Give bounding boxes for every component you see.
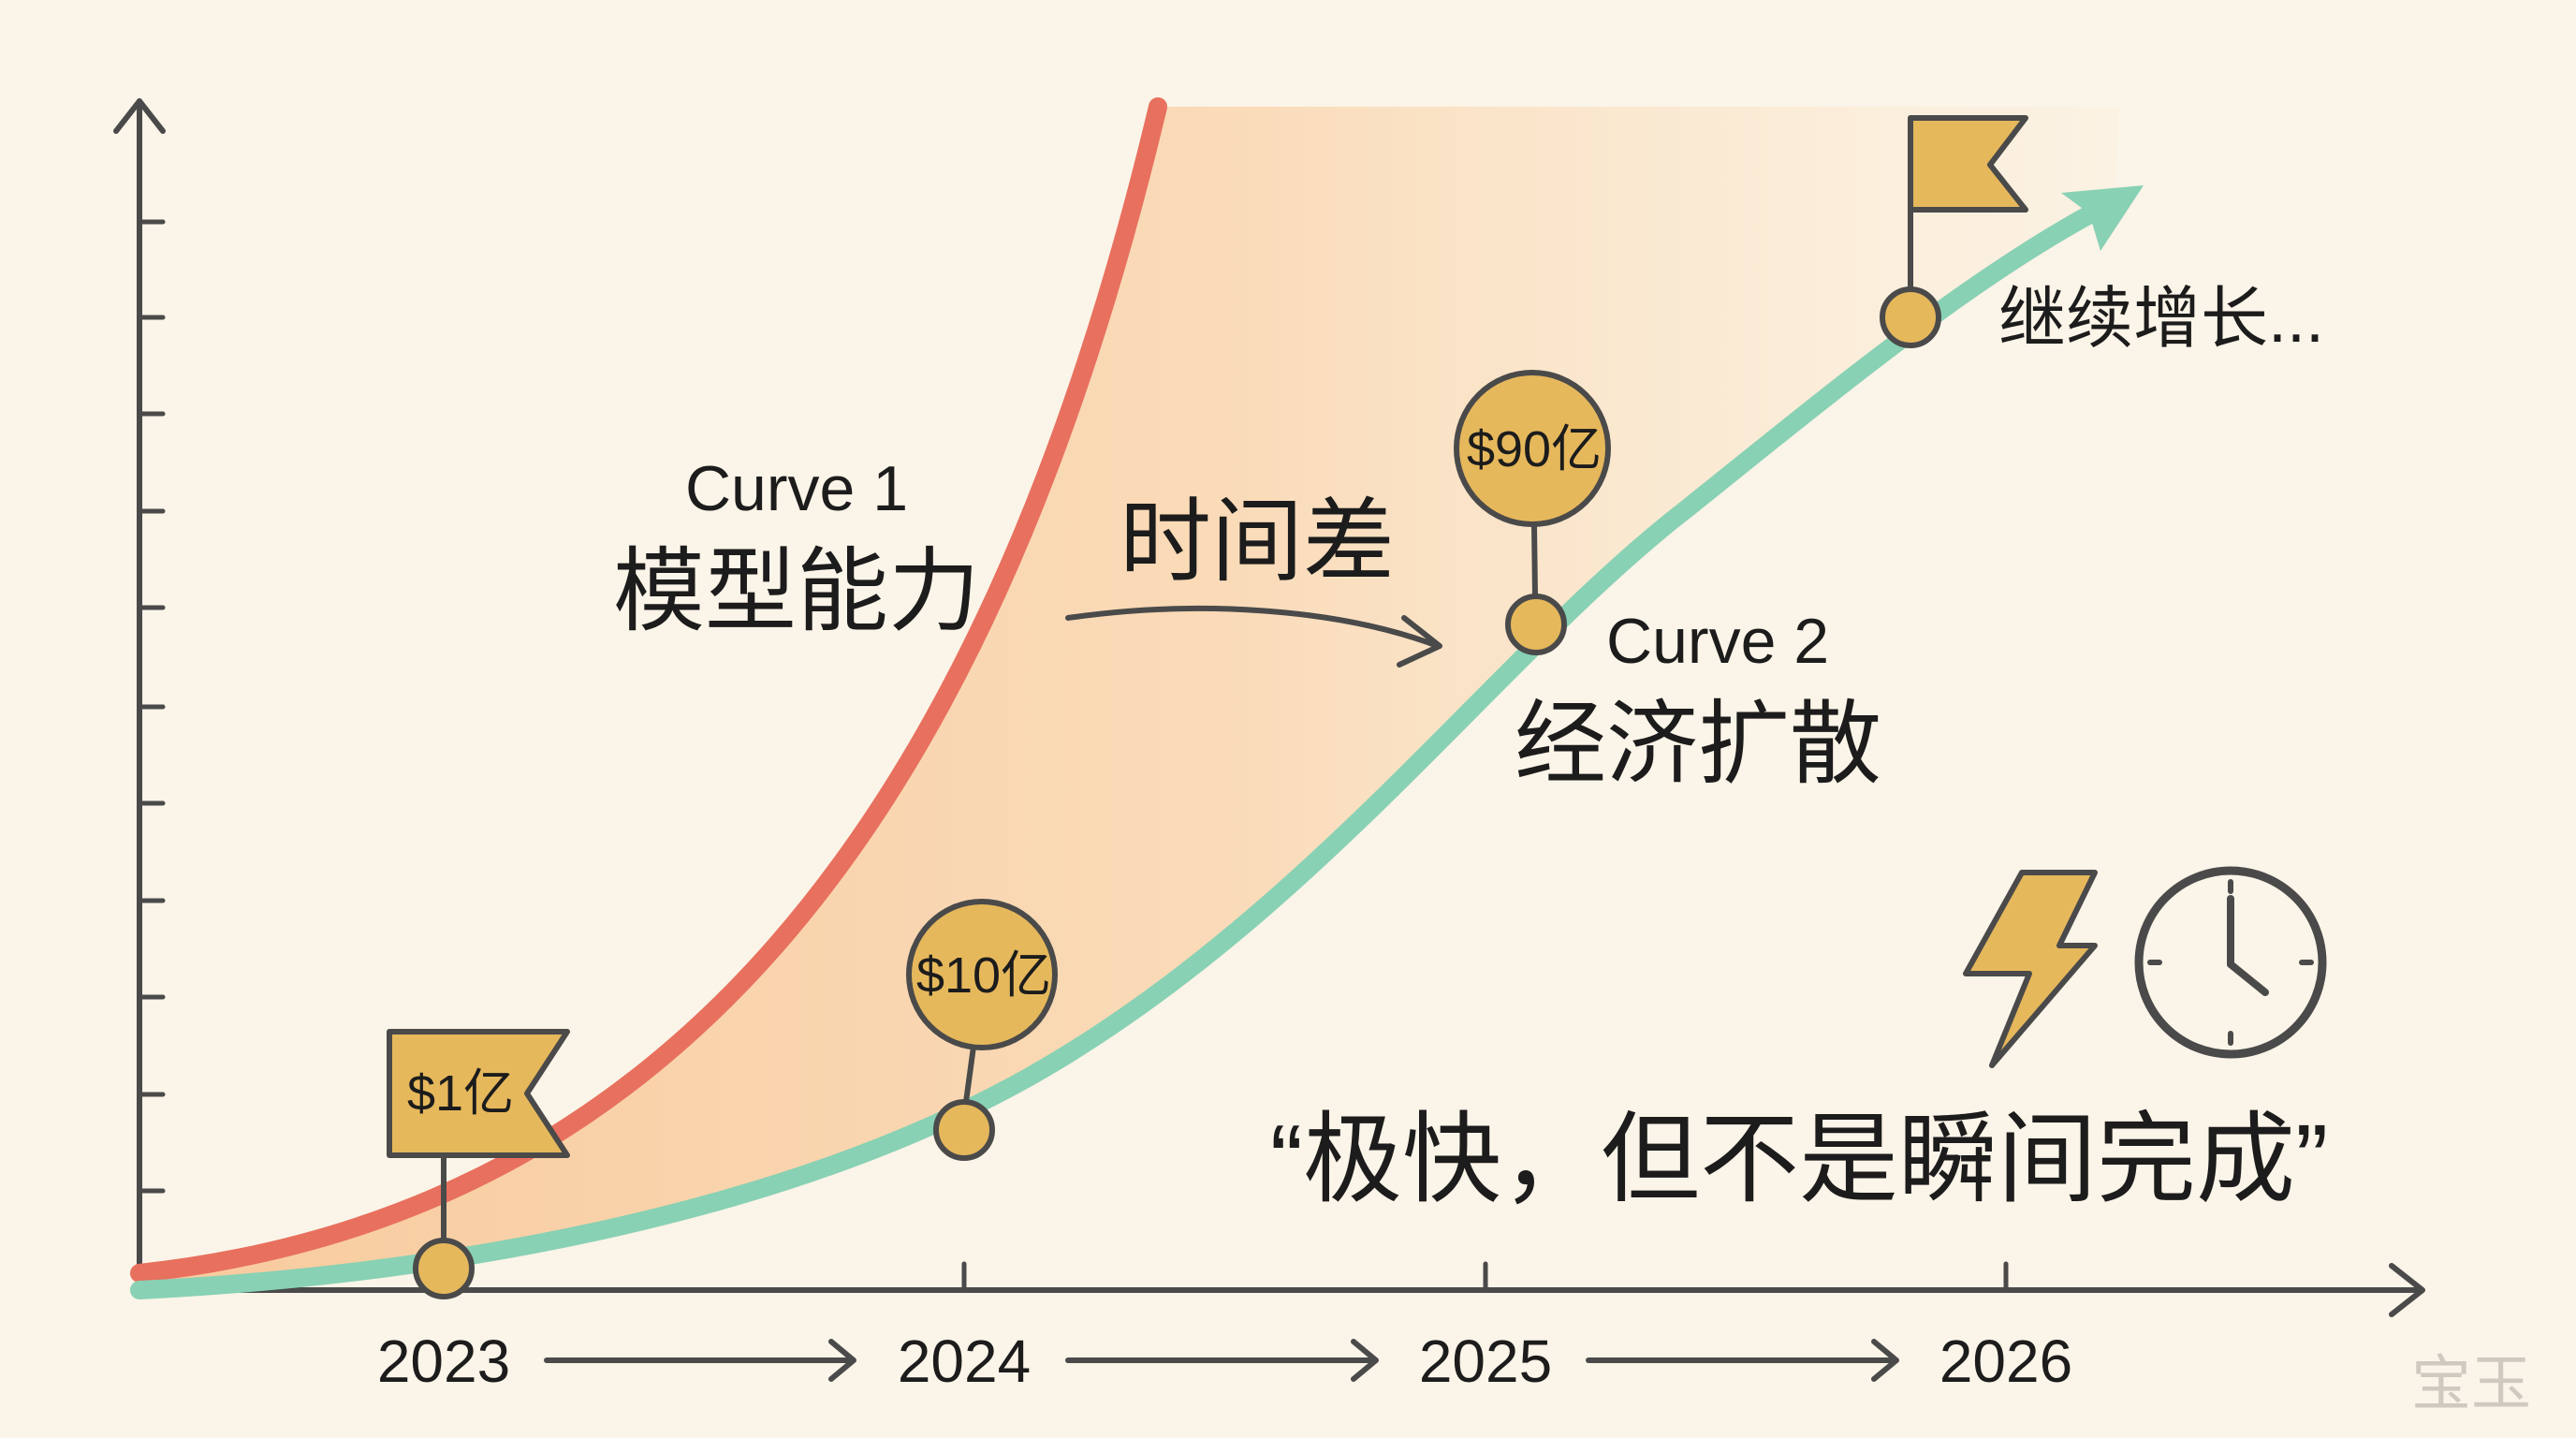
marker: $90亿: $90亿 (1467, 421, 1602, 477)
icon: clock (2139, 871, 2322, 1054)
label: curve 2: Curve 2 (1606, 606, 1829, 677)
label: curve 2 (1515, 606, 1881, 795)
year timeline: 2023 (377, 1328, 510, 1395)
arrow: time lag (1068, 609, 1440, 665)
label: curve 2: 经济扩散 (1515, 692, 1881, 795)
label: curve 1 (613, 453, 980, 642)
label: 时间差: 时间差 (1120, 490, 1395, 593)
year timeline: 2024 (898, 1328, 1031, 1395)
marker: $10亿 (909, 902, 1055, 1158)
curve 1 red (139, 107, 1158, 1273)
icon: lightning (1966, 873, 2095, 1065)
marker: end flag (1882, 118, 2026, 345)
year timeline: 2025 (1419, 1328, 1552, 1395)
watermark: 宝玉 (2411, 1350, 2531, 1417)
label: curve 1: 模型能力 (613, 539, 980, 642)
label: curve 1: Curve 1 (685, 453, 908, 524)
marker: $10亿: $10亿 (916, 947, 1051, 1004)
axes (116, 101, 2422, 1314)
shaded gap region (139, 107, 2119, 1290)
quote: “极快，但不是瞬间完成” (1270, 1105, 2328, 1215)
label: 继续增长: 继续增长... (1998, 282, 2324, 357)
year timeline (377, 1328, 2072, 1395)
year timeline: 2026 (1939, 1328, 2072, 1395)
marker: $1亿 flag: $1亿 (407, 1065, 514, 1122)
curve 2 green with arrow (139, 185, 2144, 1290)
marker: $90亿 (1456, 373, 1608, 653)
marker: $1亿 flag (389, 1032, 567, 1297)
